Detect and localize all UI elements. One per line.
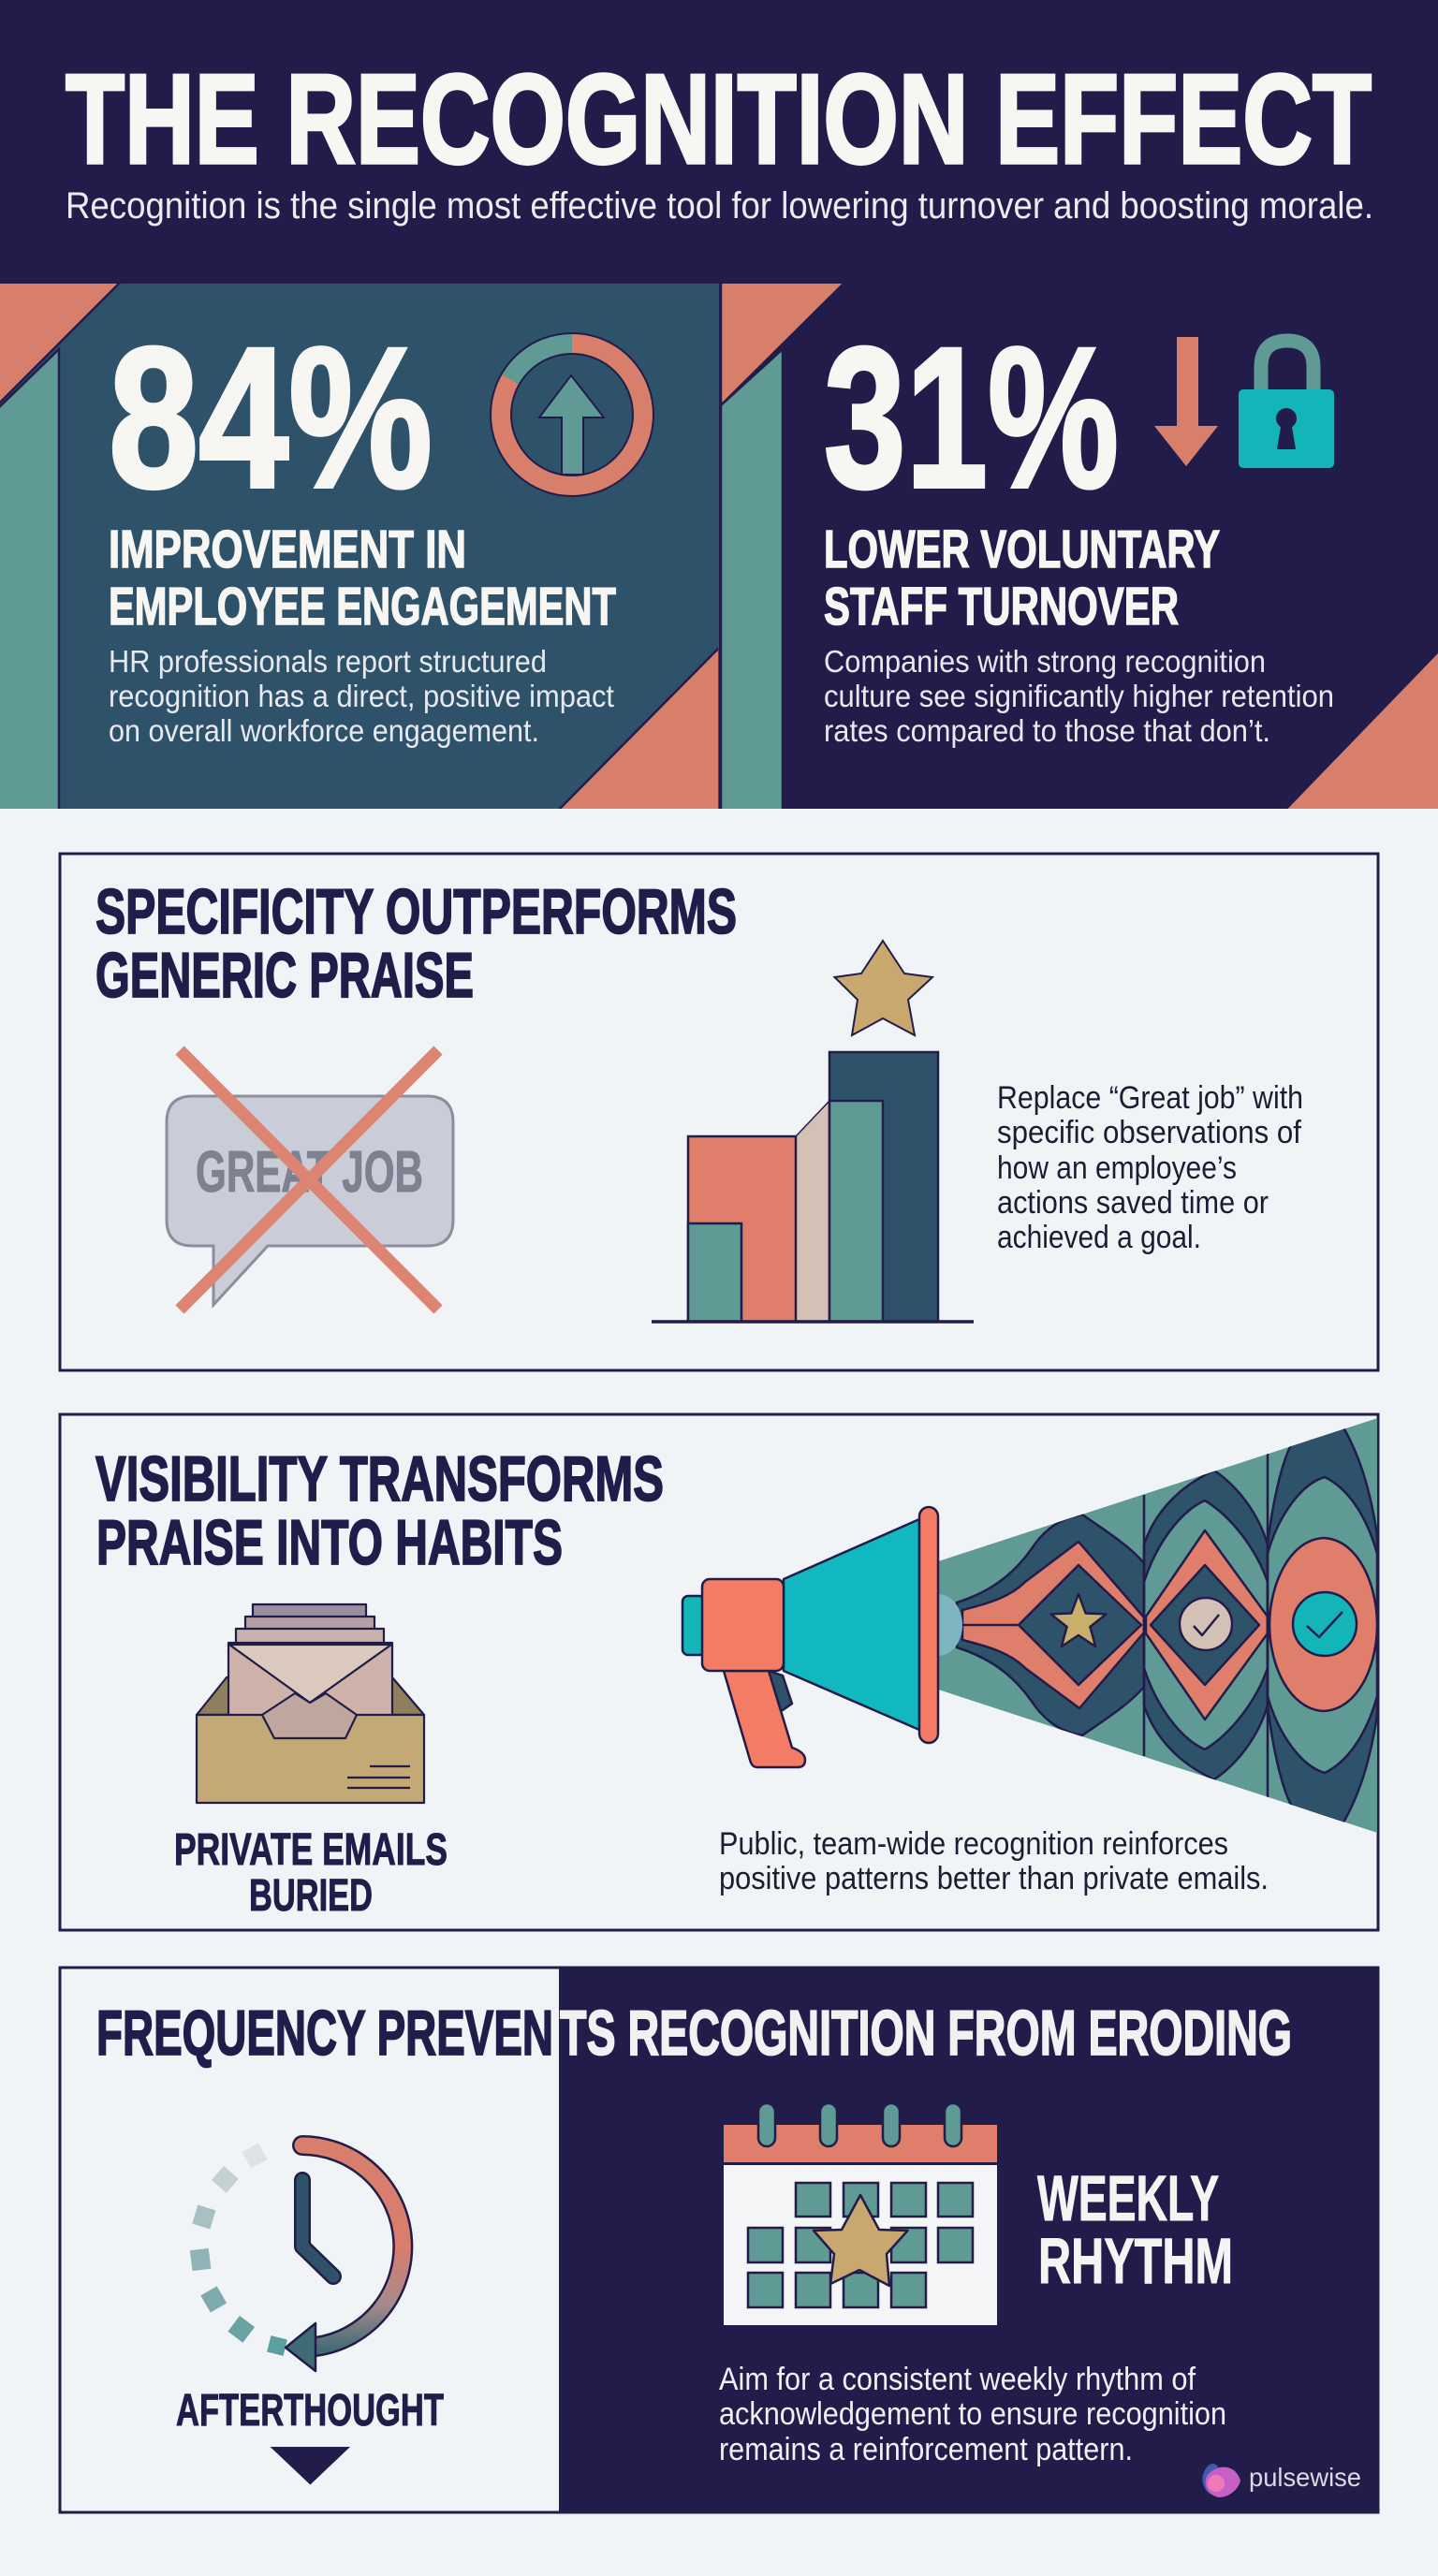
stat heading: IMPROVEMENT IN bbox=[109, 520, 466, 579]
panel: 84% engagement stat bbox=[0, 278, 724, 814]
stat number 84%: 84% bbox=[109, 306, 433, 530]
stat description: HR professionals report structured bbox=[109, 644, 547, 679]
stat heading bbox=[824, 520, 1220, 637]
logo: pulsewise bbox=[1202, 2463, 1361, 2497]
panel: 31% turnover stat bbox=[719, 278, 1438, 814]
panel text: Aim for a consistent weekly rhythm of bbox=[719, 2362, 1196, 2397]
icon: crossed-out speech bubble: GREAT JOB bbox=[196, 1140, 423, 1205]
inbox label: BURIED bbox=[249, 1871, 373, 1921]
icon: clock with fading arc bbox=[190, 2143, 403, 2371]
stat description bbox=[109, 644, 614, 748]
weekly rhythm label: WEEKLY bbox=[1037, 2162, 1219, 2234]
panel text bbox=[719, 2362, 1226, 2467]
panel heading: GENERIC PRAISE bbox=[95, 940, 474, 1011]
icon: ring with up arrow bbox=[491, 333, 653, 496]
icon: inbox of envelopes bbox=[197, 1604, 424, 1803]
stat heading: LOWER VOLUNTARY bbox=[824, 520, 1220, 579]
panel heading: PRAISE INTO HABITS bbox=[96, 1507, 563, 1578]
panel text: remains a reinforcement pattern. bbox=[719, 2432, 1133, 2467]
stat description: on overall workforce engagement. bbox=[109, 713, 539, 748]
panel text: specific observations of bbox=[997, 1115, 1302, 1150]
icon: down triangle bbox=[271, 2447, 350, 2484]
icon: calendar with star bbox=[724, 2103, 997, 2325]
stat description: Companies with strong recognition bbox=[824, 644, 1266, 679]
panel: visibility bbox=[60, 1414, 1378, 1930]
panel text: positive patterns better than private emails. bbox=[719, 1861, 1269, 1896]
stat number 31%: 31% bbox=[824, 306, 1119, 530]
stat heading bbox=[109, 520, 616, 637]
panel heading bbox=[95, 876, 737, 1011]
panel heading: VISIBILITY TRANSFORMS bbox=[95, 1443, 664, 1515]
panel text: how an employee’s bbox=[997, 1150, 1237, 1186]
icon: padlock bbox=[1239, 341, 1334, 468]
stat description bbox=[824, 644, 1334, 748]
panel heading: SPECIFICITY OUTPERFORMS bbox=[95, 876, 737, 947]
stat description: recognition has a direct, positive impact bbox=[109, 679, 614, 713]
inbox label bbox=[174, 1825, 448, 1921]
panel text: achieved a goal. bbox=[997, 1220, 1201, 1255]
panel heading bbox=[96, 1998, 1292, 2069]
afterthought label: AFTERTHOUGHT bbox=[176, 2386, 444, 2436]
panel heading: FREQUENCY PREVEN bbox=[96, 1998, 553, 2069]
panel heading bbox=[95, 1443, 664, 1578]
panel text: acknowledgement to ensure recognition bbox=[719, 2396, 1226, 2432]
weekly rhythm label bbox=[1037, 2162, 1233, 2297]
inbox label: PRIVATE EMAILS bbox=[174, 1825, 448, 1875]
header banner bbox=[0, 0, 1438, 285]
icon: megaphone bbox=[682, 1507, 962, 1767]
stat description: rates compared to those that don’t. bbox=[824, 713, 1270, 748]
panel text: Replace “Great job” with bbox=[997, 1080, 1303, 1116]
icon: down arrow bbox=[1154, 337, 1218, 466]
corner shapes right bbox=[721, 278, 1438, 814]
sound beam pattern bbox=[938, 1418, 1377, 1833]
panel text bbox=[719, 1826, 1269, 1896]
panel: specificity bbox=[60, 854, 1378, 1370]
panel text: actions saved time or bbox=[997, 1185, 1269, 1221]
stat heading: EMPLOYEE ENGAGEMENT bbox=[109, 577, 616, 637]
bar chart with star bbox=[652, 941, 974, 1322]
weekly rhythm label: RHYTHM bbox=[1038, 2225, 1233, 2297]
logo: pulsewise: pulsewise bbox=[1249, 2463, 1361, 2492]
panel text bbox=[997, 1080, 1303, 1255]
stat description: culture see significantly higher retention bbox=[824, 679, 1334, 713]
corner shapes left bbox=[0, 278, 724, 814]
panel: frequency bbox=[60, 1968, 1379, 2513]
icon: crossed-out speech bubble bbox=[167, 1050, 453, 1310]
stat heading: STAFF TURNOVER bbox=[824, 577, 1179, 637]
panel text: Public, team-wide recognition reinforces bbox=[719, 1826, 1228, 1862]
